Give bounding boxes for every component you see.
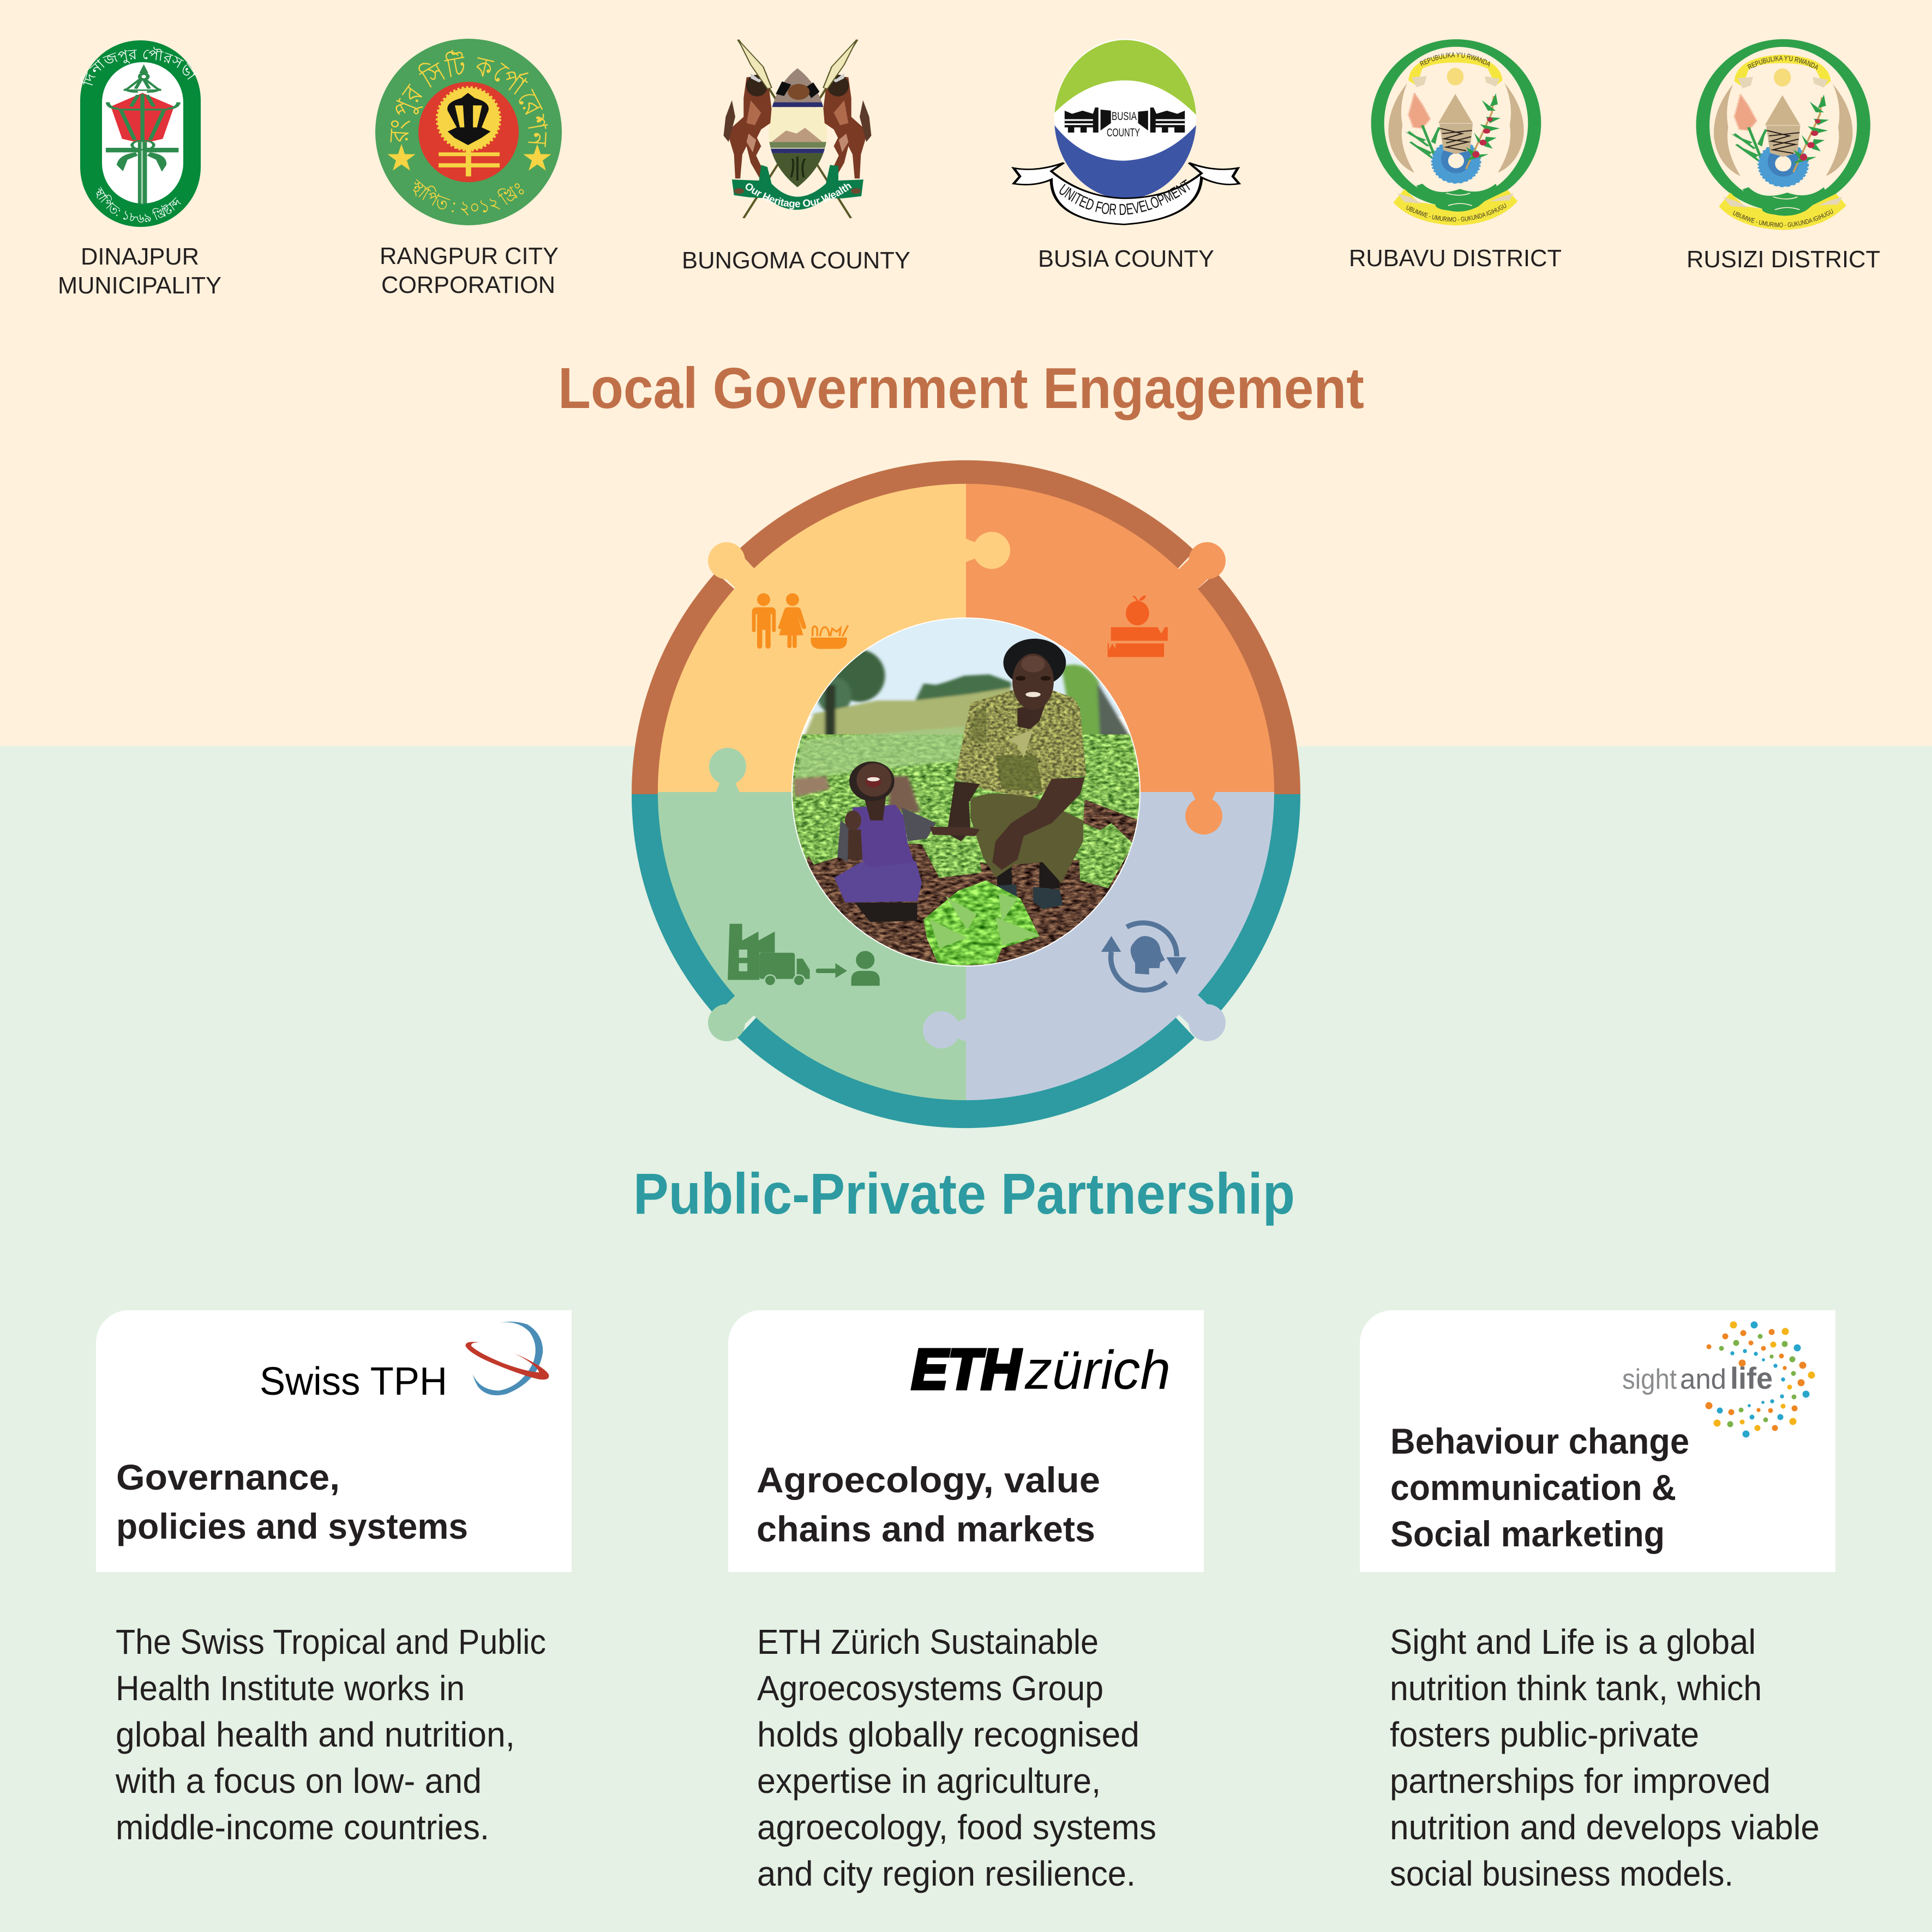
text block: Sight and Life description: nutrition and develops viable [1390,1808,1820,1847]
logo: Swiss TPH [260,1322,549,1403]
card heading: Agroecology, value chains and markets [757,1460,1100,1549]
text block: Swiss TPH description [115,1622,546,1847]
logo: Busia County: UNITED FOR DEVELOPMENT [1059,179,1190,215]
text block: Sight and Life description: Sight and Life is a global [1390,1622,1756,1661]
panel: ETH Zürich card [728,1310,1204,1572]
logo: Dinajpur Municipality: স্থাপিত: ১৮৬৯ খ্রিষ্টাব্দ [96,187,181,223]
logo: ETH zürich: zürich [1024,1340,1171,1401]
logo: Bungoma County: Our Heritage Our Wealth [745,183,852,209]
text block: ETH Zürich description [757,1622,1156,1893]
label: Bungoma County: BUNGOMA COUNTY [682,247,910,274]
text block: ETH Zürich description: Agroecosystems Group [757,1669,1103,1708]
logo: Bungoma County [723,39,872,218]
logo: Rubavu District: REPUBULIKA Y'U RWANDA [1419,52,1490,67]
logo: sight and life: life [1730,1361,1773,1395]
text block: ETH Zürich description: holds globally recognised [757,1715,1139,1754]
card heading: Agroecology, value chains and markets: Agroecology, value [757,1460,1100,1500]
icon: factory, truck, arrow and consumer [728,924,880,986]
woman [997,867,1012,886]
child [855,903,917,922]
text block: ETH Zürich description: agroecology, food systems [757,1808,1156,1847]
card heading: Agroecology, value chains and markets: chains and markets [757,1509,1095,1549]
logo: Rubavu District: UBUMWE - UMURIMO - GUKUNDA IGIHUGU [1406,203,1507,221]
icon: man, woman and food basket [752,593,848,649]
puzzle piece: green bottom-left [658,792,966,1100]
label: Busia County: BUSIA COUNTY [1038,245,1214,272]
text block: Sight and Life description: partnerships for improved [1390,1761,1771,1801]
text block: Swiss TPH description: The Swiss Tropical and Public [116,1622,546,1661]
background: cream upper band [0,0,1932,746]
interlock tabs [709,532,1222,1048]
label: Rusizi District: RUSIZI DISTRICT [1687,246,1880,273]
logo: Busia County: COUNTY [1107,127,1140,139]
label: Dinajpur Municipality: MUNICIPALITY [58,272,221,299]
logo: Swiss TPH: Swiss TPH [260,1360,447,1403]
logo: Dinajpur Municipality: দিনাজপুর পৌরসভা [81,47,196,85]
foreground plant [923,880,1039,967]
logo: Rangpur City Corporation [375,39,562,225]
heading: Public-Private Partnership: Public-Private Partnership [633,1162,1295,1226]
text block: Sight and Life description [1390,1622,1820,1893]
label: Rangpur City Corporation: RANGPUR CITY [380,243,559,269]
label: Dinajpur Municipality [58,243,221,299]
outer ring: teal lower arcs [647,794,1285,1113]
logo: Rangpur City Corporation: রংপুর সিটি কর্পোরেশন [391,50,548,147]
text block: Sight and Life description: fosters public-private [1390,1715,1699,1754]
logo: Busia County [1011,39,1241,225]
puzzle piece: blue-grey bottom-right [966,792,1274,1100]
text block: ETH Zürich description: and city region resilience. [757,1854,1136,1893]
puzzle piece: orange top-right [966,484,1274,792]
logo: Rubavu District [1371,39,1541,226]
puzzle ring diagram [647,476,1285,1113]
icon: head with circular arrows [1101,923,1186,990]
logo: sight and life [1622,1322,1815,1437]
text block: Swiss TPH description: global health and nutrition, [116,1715,515,1754]
logo: Dinajpur Municipality [80,40,201,227]
card heading: Governance, policies and systems: policies and systems [116,1506,468,1546]
text block: Sight and Life description: social business models. [1390,1854,1733,1893]
logo: ETH zürich: ETH [911,1338,1022,1401]
text block: Sight and Life description: nutrition think tank, which [1390,1669,1762,1708]
logo: Rusizi District: UBUMWE - UMURIMO - GUKUNDA IGIHUGU [1733,209,1833,227]
logo: sight and life: sight [1622,1364,1677,1395]
outer ring: brown upper arcs [647,476,1285,794]
panel: Swiss TPH card [96,1310,572,1572]
puzzle piece: yellow top-left [658,484,966,792]
text block: Swiss TPH description: Health Institute works in [116,1669,465,1708]
logo: sight and life: and [1680,1364,1726,1395]
card heading: Behaviour change communication and social marketing: Behaviour change [1390,1421,1689,1461]
text block: ETH Zürich description: ETH Zürich Sustainable [757,1622,1099,1661]
text block: Swiss TPH description: middle-income countries. [116,1808,489,1847]
logo: Rusizi District: REPUBULIKA Y'U RWANDA [1748,56,1818,70]
logo: Busia County: BUSIA [1112,110,1137,123]
card heading: Behaviour change communication and social marketing [1390,1421,1689,1554]
background: pale green lower band [0,746,1932,1932]
card heading: Behaviour change communication and social marketing: communication & [1390,1467,1676,1508]
panel: Sight and Life card [1360,1310,1835,1572]
logo: Rusizi District [1696,39,1870,230]
photo: woman and child in a field [783,612,1152,971]
label: Rubavu District: RUBAVU DISTRICT [1349,245,1562,272]
card heading: Behaviour change communication and social marketing: Social marketing [1390,1514,1665,1554]
text block: ETH Zürich description: expertise in agriculture, [757,1761,1101,1801]
logo: Rangpur City Corporation: স্থাপিত : ২০১২ খ্রিঃ [413,179,524,216]
label: Rangpur City Corporation [380,243,559,298]
card heading: Governance, policies and systems: Governance, [116,1457,340,1497]
text block: Swiss TPH description: with a focus on low- and [115,1761,482,1801]
card heading: Governance, policies and systems [116,1457,468,1546]
heading: Local Government Engagement: Local Government Engagement [558,356,1364,421]
label: Rangpur City Corporation: CORPORATION [381,272,555,298]
label: Dinajpur Municipality: DINAJPUR [81,243,199,270]
icon: apple on books [1108,596,1168,657]
logo: ETH zürich [911,1338,1171,1401]
